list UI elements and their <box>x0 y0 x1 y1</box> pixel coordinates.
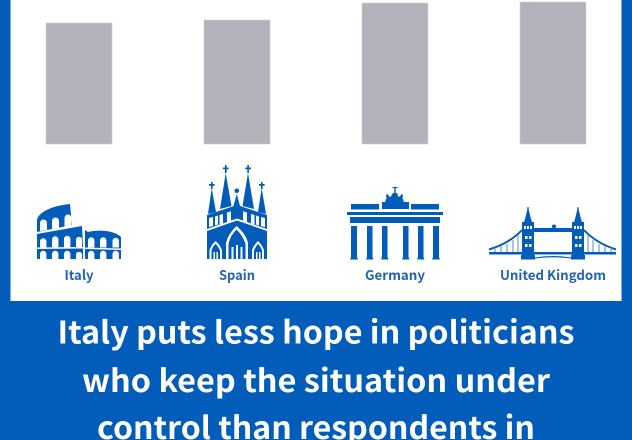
heading: who keep the situation under <box>82 356 550 401</box>
icon: Sagrada Familia <box>207 165 267 259</box>
bar: Spain <box>204 20 270 144</box>
label: Spain: Spain <box>219 264 255 284</box>
heading <box>58 308 574 440</box>
bar: Germany <box>362 3 428 144</box>
bar: United Kingdom <box>520 2 586 144</box>
bar: Italy <box>46 23 112 144</box>
label: United Kingdom: United Kingdom <box>500 264 606 284</box>
label: Italy: Italy <box>64 264 94 284</box>
heading: Italy puts less hope in politicians <box>58 308 574 352</box>
panel: white chart area <box>10 0 622 301</box>
bar chart <box>46 2 586 144</box>
icon: Tower Bridge <box>489 207 616 260</box>
label: Germany: Germany <box>365 264 425 284</box>
icon: Brandenburg Gate <box>347 187 443 260</box>
icon: Colosseum <box>37 204 121 259</box>
